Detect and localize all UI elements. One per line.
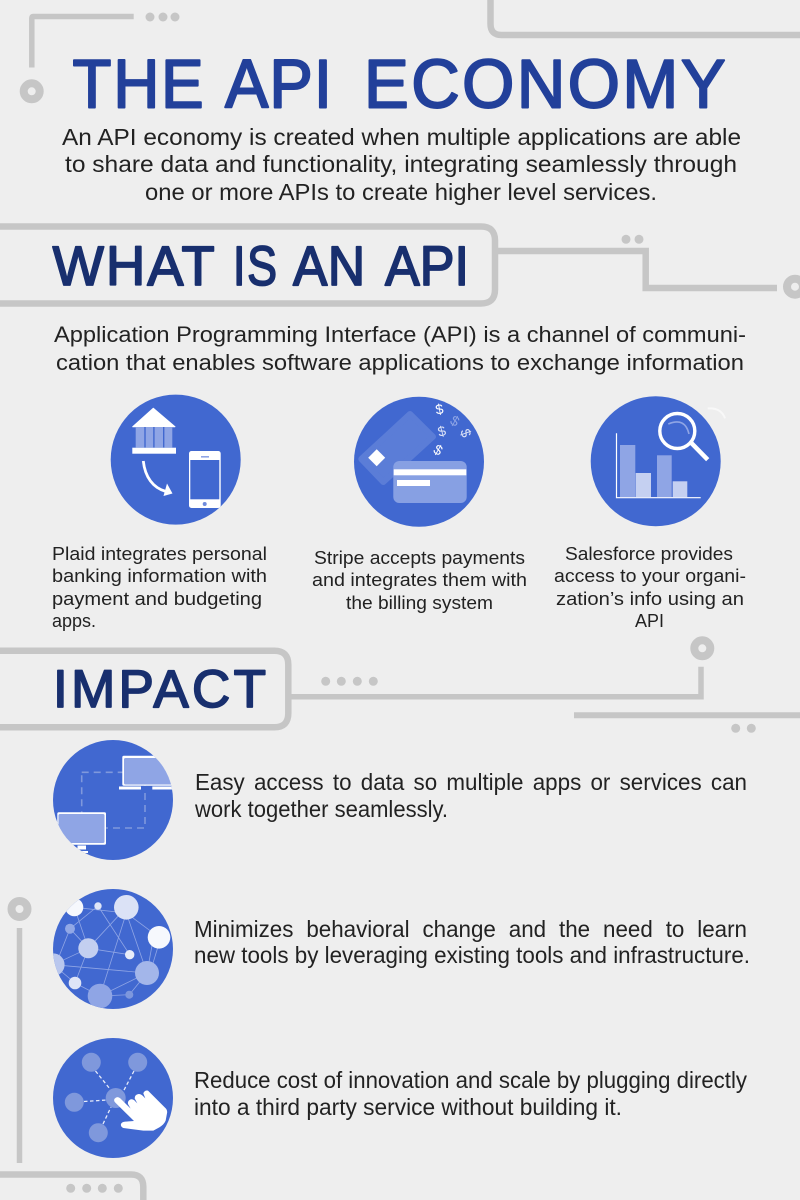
caption: Salesforce: access to your organi-: [554, 565, 746, 586]
caption: Stripe: [312, 547, 527, 613]
impact text: reduce cost: Reduce cost of innovation and scale by plugging directly: [194, 1067, 747, 1093]
caption: Stripe: the billing system: [346, 592, 493, 613]
section heading: what is an API: API: [385, 235, 469, 297]
caption: Plaid: banking information with: [52, 565, 267, 586]
caption: Stripe: Stripe accepts payments: [314, 547, 525, 568]
section heading: what is an API: IS: [233, 234, 277, 297]
caption: Stripe: and integrates them with: [312, 569, 527, 590]
icon: connected computers: [53, 740, 174, 860]
caption: Plaid: payment and budgeting: [52, 588, 262, 609]
icon: chart and magnifier: [591, 396, 725, 526]
API definition text: [54, 322, 746, 375]
section heading: impact: [0, 651, 288, 727]
impact text: minimizes change: new tools by leveraging existing tools and infrastructure.: [194, 942, 750, 968]
impact text: easy access: [194, 769, 747, 822]
intro text block: [62, 124, 741, 205]
section heading: impact: IMPACT: [53, 660, 266, 719]
icon: credit cards: [354, 397, 484, 527]
icon: credit cards: $: [448, 412, 463, 430]
impact text: reduce cost: [194, 1067, 747, 1120]
intro text block: one or more APIs to create higher level services.: [145, 179, 657, 205]
icon: hand touching hub: [53, 1038, 173, 1158]
impact text: easy access: Easy access to data so multiple apps or services can: [195, 769, 747, 795]
icon: bank to phone: [111, 395, 241, 525]
API definition text: Application Programming Interface (API) is a channel of communi-: [54, 322, 746, 347]
title: ECONOMY: [364, 47, 726, 122]
caption: Plaid: Plaid integrates personal: [52, 543, 267, 564]
title: API: [225, 47, 332, 123]
impact text: reduce cost: into a third party service without building it.: [194, 1094, 622, 1120]
intro text block: to share data and functionality, integrating seamlessly through: [65, 151, 737, 177]
section heading: what is an API: AN: [293, 235, 365, 297]
caption: Salesforce: [554, 543, 746, 631]
title: [73, 46, 726, 123]
caption: Plaid: apps.: [52, 610, 96, 631]
impact text: easy access: work together seamlessly.: [194, 796, 448, 822]
icon: credit cards: $: [431, 441, 446, 459]
intro text block: An API economy is created when multiple applications are able: [62, 124, 741, 150]
icon: credit cards: $: [436, 422, 448, 440]
impact text: minimizes change: [194, 916, 750, 968]
section heading: what is an API: [0, 226, 495, 304]
section heading: what is an API: WHAT: [53, 234, 215, 297]
caption: Plaid: [52, 543, 267, 631]
icon: network: [42, 889, 173, 1009]
icon: credit cards: $: [457, 427, 475, 440]
caption: Salesforce: API: [635, 610, 664, 631]
title: THE: [73, 46, 204, 123]
API definition text: cation that enables software applications to exchange information: [56, 350, 744, 375]
impact text: minimizes change: Minimizes behavioral change and the need to learn: [194, 916, 747, 942]
caption: Salesforce: Salesforce provides: [565, 543, 733, 564]
icon: credit cards: $: [434, 400, 445, 418]
caption: Salesforce: zation’s info using an: [556, 588, 744, 609]
